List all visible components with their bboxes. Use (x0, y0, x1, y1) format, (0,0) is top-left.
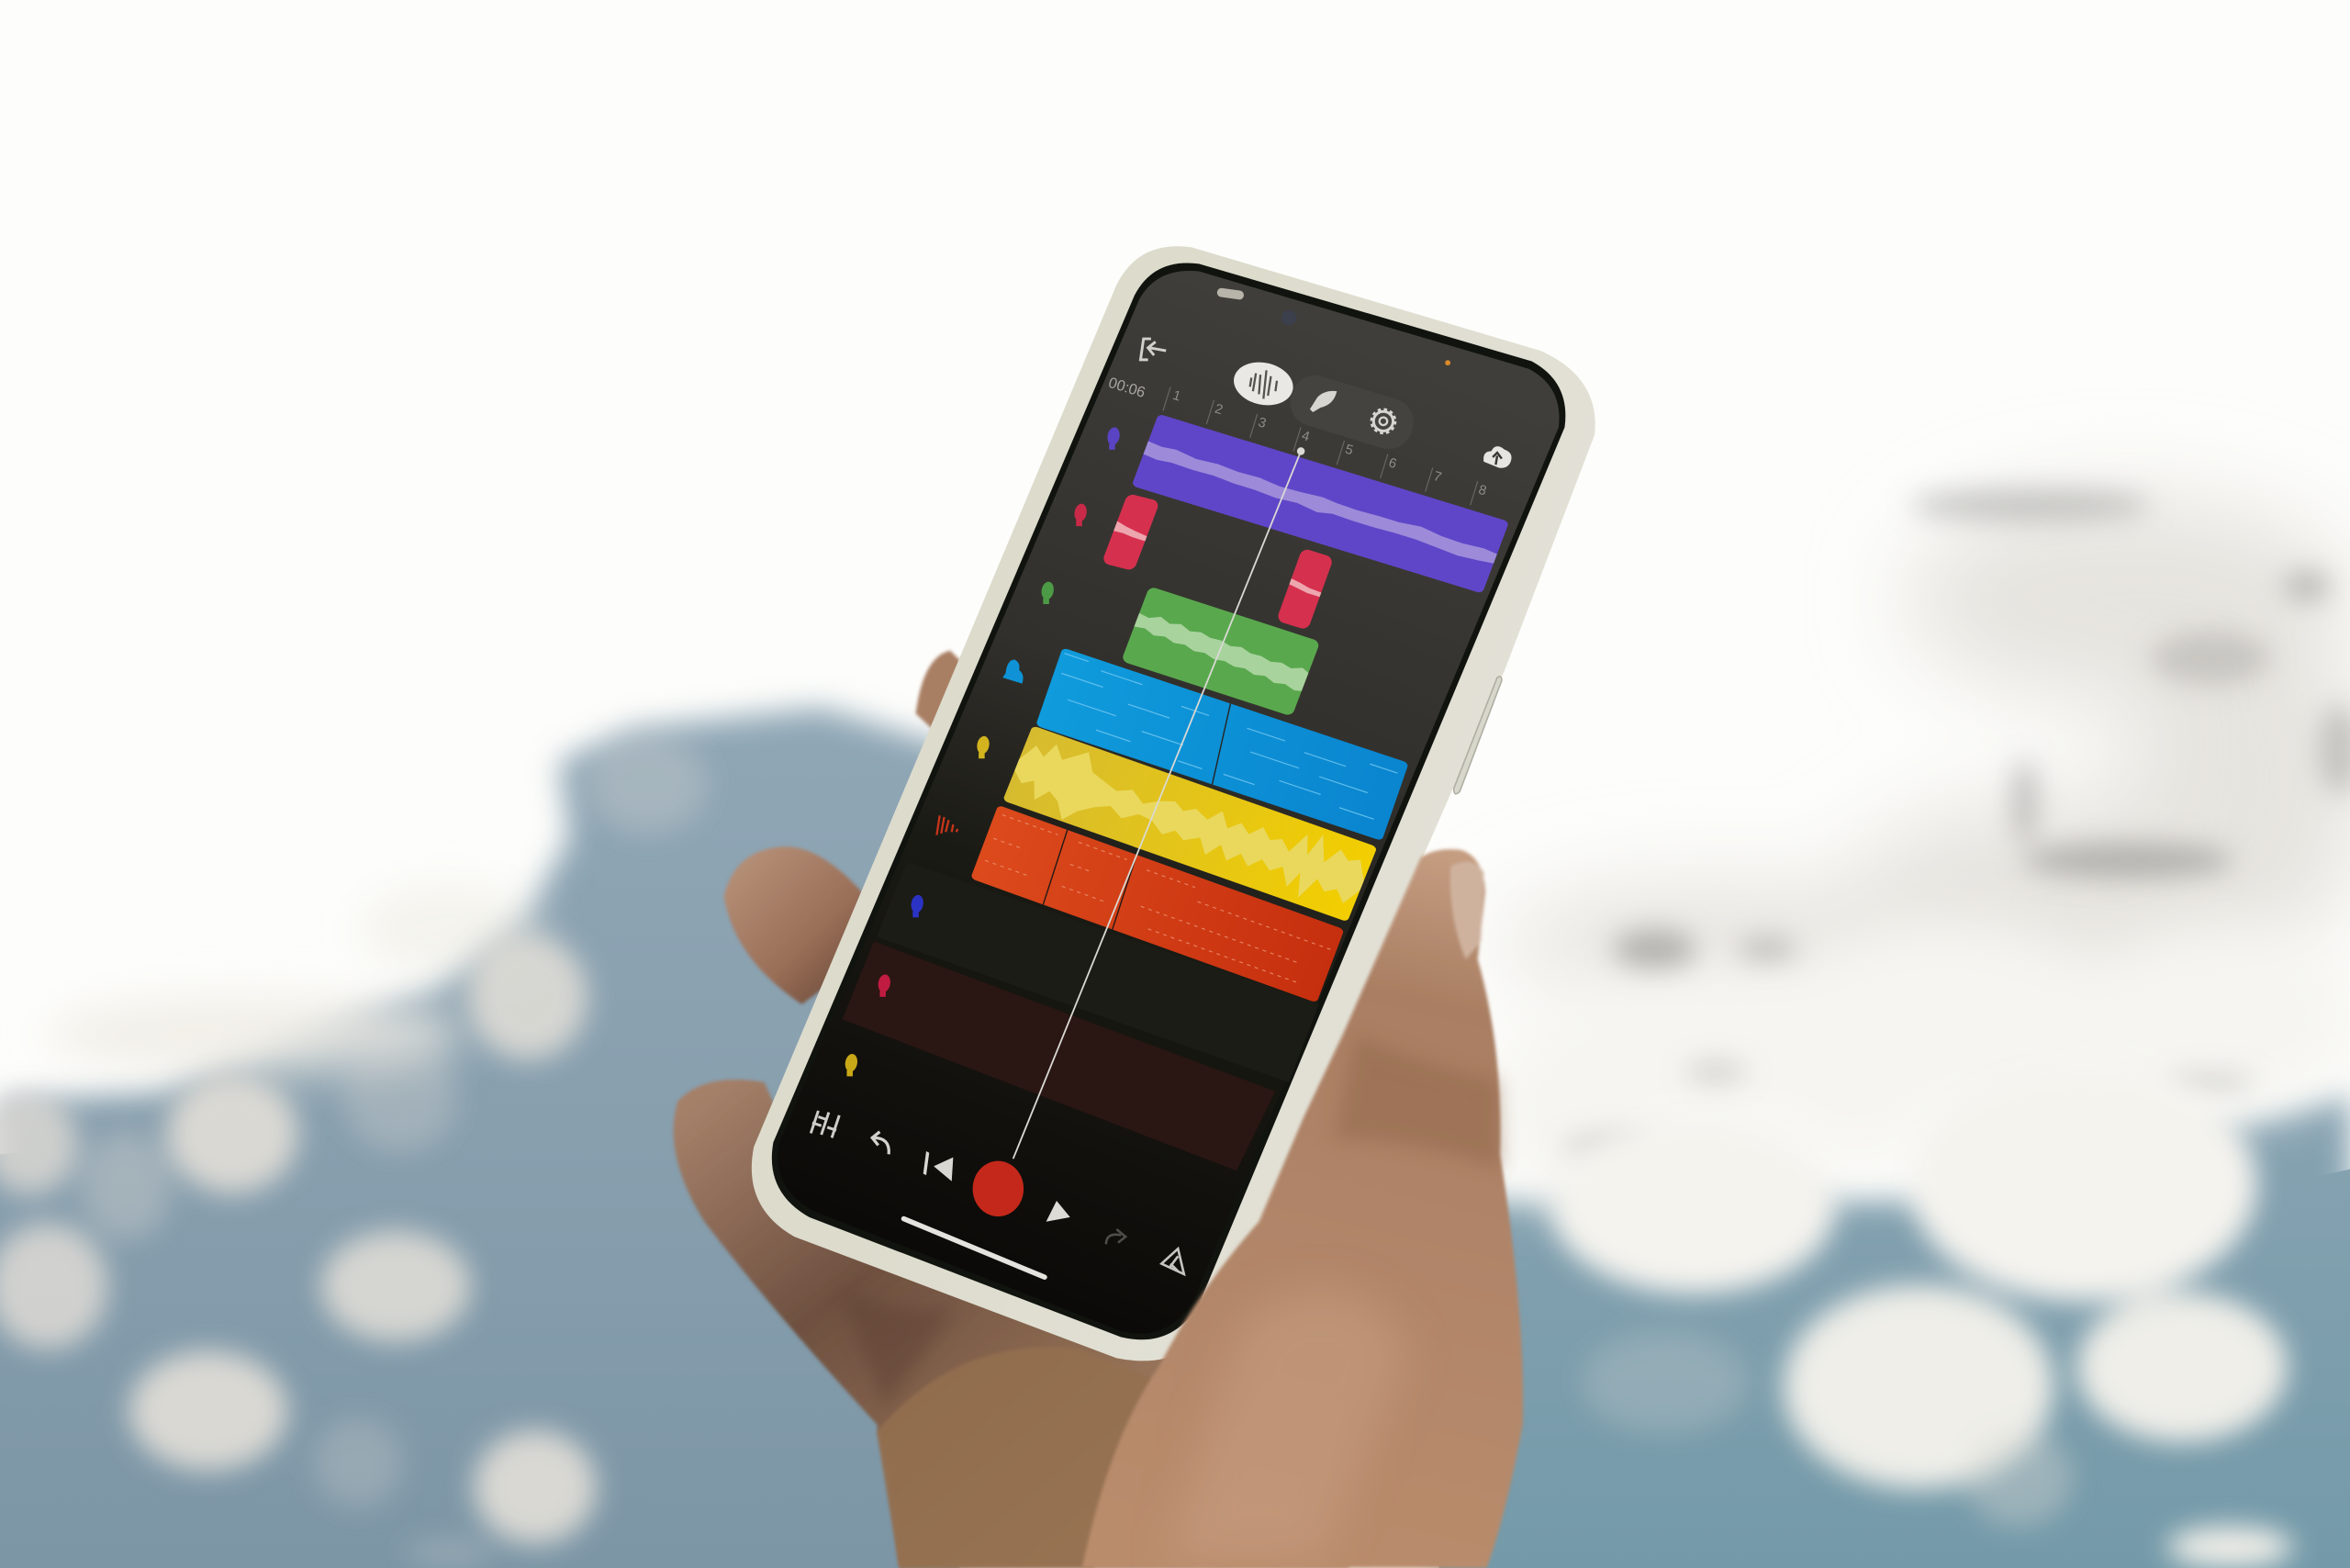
icon: mixer sliders (811, 1111, 839, 1137)
thumb shadow (1334, 1035, 1502, 1170)
timeline ruler numbers: 3 (1257, 415, 1268, 431)
playhead line (1013, 447, 1304, 1159)
timeline ruler numbers: 8 (1477, 483, 1488, 498)
midi notes (1043, 654, 1400, 828)
track: purple vocal clip (1132, 414, 1509, 594)
phone bezel (772, 263, 1565, 1339)
hand: thumb and heel of palm in front of phone (1082, 849, 1523, 1568)
finger: index fingertip (916, 651, 974, 737)
dark tab pill behind feather and settings (1284, 369, 1419, 455)
timeline ruler numbers: 1 (1171, 388, 1182, 405)
timeline ruler numbers: 6 (1387, 455, 1398, 472)
icon: redo (1106, 1229, 1125, 1244)
timeline ruler numbers: 5 (1343, 442, 1355, 458)
indicator dot (1445, 360, 1450, 365)
icon: green mic (1040, 581, 1055, 604)
background: left bokeh circles (0, 734, 708, 1568)
icon: settings gear (1371, 409, 1395, 433)
track: green clip (1121, 586, 1320, 717)
timeline ruler numbers: 2 (1213, 402, 1225, 418)
button: record (973, 1161, 1024, 1216)
palm: ring finger and palm (674, 1080, 1348, 1568)
background: soft warm shoreline shading (45, 884, 540, 1073)
icon: cloud upload (1483, 446, 1512, 468)
track: blue piano clip (1035, 647, 1409, 841)
purple waveform (1142, 441, 1499, 566)
background: right pale grey wash (1499, 495, 2350, 1004)
green waveform (1130, 610, 1311, 692)
thumb nail (1450, 862, 1483, 959)
finger: middle finger (724, 846, 862, 1004)
icon: blue mic (910, 894, 924, 917)
red waveform two (1288, 578, 1323, 597)
dim empty track: red row (843, 941, 1275, 1170)
red waveform one (1113, 521, 1149, 541)
icon: metronome (1161, 1249, 1184, 1274)
phone case (752, 246, 1595, 1361)
icon: red drum wave (936, 815, 957, 835)
timeline ruler numbers (1171, 388, 1488, 498)
background: blue water on the left and right (0, 708, 2350, 1568)
time counter: 00:06 (1106, 375, 1147, 401)
home indicator (903, 1219, 1045, 1277)
bottom toolbar (811, 1111, 1184, 1277)
icon: crimson mic (877, 973, 891, 997)
icon: play (1046, 1201, 1070, 1222)
icon: exit project (1140, 339, 1166, 360)
track: red clip one (1102, 493, 1160, 571)
blue clip divider (1203, 703, 1239, 784)
background: right white mass (1483, 922, 2350, 1199)
dim empty track: blue row (877, 862, 1319, 1082)
icon: previous (923, 1151, 953, 1182)
background: right grey blotches (1564, 488, 2350, 1161)
track icons column (844, 426, 1121, 1076)
drum hits (982, 815, 1338, 990)
icon: purple mic (1106, 426, 1121, 450)
palm: lit lower hand (877, 1347, 1154, 1568)
phone (752, 246, 1595, 1361)
timeline ruler numbers: 7 (1432, 469, 1443, 486)
track: orange drum clip (970, 805, 1344, 1002)
track: yellow vocal clip (1002, 725, 1377, 922)
tab: active waveform pill (1230, 357, 1297, 410)
palm highlight (1169, 1288, 1409, 1559)
timeline ruler ticks (1163, 386, 1478, 505)
front camera (1281, 310, 1296, 325)
track: red clip two (1276, 548, 1334, 631)
orange clip dividers (1040, 830, 1140, 929)
icon: waveform bars (1250, 370, 1277, 398)
background: right bokeh circles (1551, 1068, 2293, 1568)
speaker slot (1216, 287, 1245, 300)
icon: blue piano (1002, 659, 1024, 684)
icon: red mic (1073, 503, 1088, 526)
timeline ruler numbers: 4 (1300, 429, 1311, 445)
hand: palm and fingers behind phone (674, 651, 1348, 1568)
palm: crease shadow (839, 1289, 959, 1409)
icon: yellow mic (976, 735, 990, 758)
phone screen (778, 271, 1560, 1334)
icon: gold mic (844, 1053, 858, 1076)
icon: undo (872, 1132, 889, 1154)
icon: feather (1310, 391, 1337, 412)
yellow waveform (1003, 732, 1375, 921)
phone side button (1454, 677, 1502, 794)
